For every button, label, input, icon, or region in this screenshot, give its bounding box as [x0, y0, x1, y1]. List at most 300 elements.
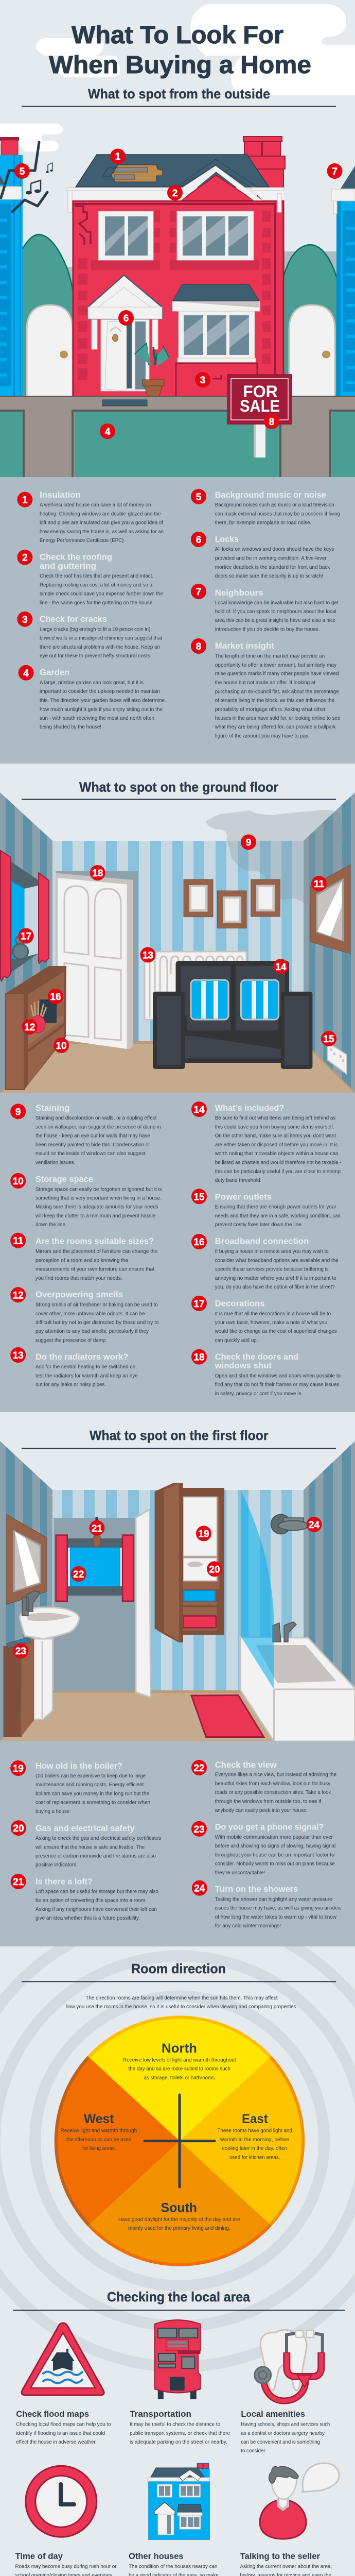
- marker 17: 17: [21, 931, 31, 942]
- item 3 cracks: bowed walls or a misaligned chimney can suggest that: [40, 635, 162, 641]
- item 5 background noise: there, for example aeroplane or road noise.: [215, 519, 311, 526]
- sector south: mainly used for the primary living and dining.: [128, 2225, 230, 2231]
- bay window: [172, 284, 260, 397]
- marker 18: 18: [92, 868, 103, 879]
- marker 16: 16: [50, 992, 61, 1003]
- item 14 what's included: 14: [193, 1105, 205, 1115]
- marker 13: 13: [143, 950, 153, 961]
- item 2 roofing: [17, 550, 163, 606]
- sector east: warmth in the morning, before: [220, 2137, 289, 2143]
- marker 12: 12: [24, 1022, 35, 1033]
- sector east: cooling later in the day, often: [222, 2145, 287, 2151]
- illustration: living room: [0, 788, 355, 1097]
- item 1 insulation: how energy saving the house is, as well as asking for an: [40, 529, 164, 535]
- marker 13: [140, 947, 155, 962]
- sector east: [180, 2056, 305, 2226]
- marker 3: 3: [200, 375, 205, 386]
- item 23 phone signal: With mobile communication more popular than ever: [215, 1834, 333, 1840]
- item 9 staining: seen on wallpaper, can suggest the presence of damp in: [36, 1124, 161, 1130]
- item 17 decorations: [191, 1296, 337, 1344]
- marker 19: [196, 1526, 211, 1541]
- item 4 garden: how much sunlight it gets if you enjoy sitting out in the: [40, 706, 163, 713]
- item 6 locks: All locks on windows and doors should have the keys: [215, 546, 334, 552]
- item 22 view: 22: [193, 1763, 205, 1774]
- item 12 smells: [10, 1287, 159, 1344]
- item: local amenities: can be convenient and is something: [241, 2439, 320, 2445]
- router: [39, 999, 57, 1023]
- item: transportation: It may be useful to check the distance to: [130, 2421, 220, 2428]
- item 22 view: [191, 1760, 336, 1814]
- radiator: [145, 952, 246, 1020]
- item 8 market insight: purchasing an ex-council flat, ask about the percentage: [215, 688, 339, 694]
- sector north: [87, 2015, 272, 2141]
- item 6 locks: provided and be in working condition. A five-lever: [215, 555, 327, 562]
- item 7 neighbours: Neighbours: [215, 588, 263, 598]
- item 22 view: Check the view: [215, 1760, 277, 1770]
- item: time of day: Time of day: [15, 2552, 63, 2561]
- for sale sign: SALE: [240, 397, 280, 415]
- item 20 gas and electrical: Gas and electrical safety: [36, 1824, 135, 1833]
- marker 22: [71, 1566, 86, 1582]
- marker 15: 15: [323, 1034, 334, 1045]
- item 14 what's included: be listed as chattels and would therefore not be taxable -: [215, 1159, 342, 1165]
- for sale sign: FOR: [243, 382, 278, 401]
- item 2 roofing: Check the roof has tiles that are present and intact.: [40, 573, 153, 579]
- side cabinet and phone: [4, 1638, 34, 1737]
- item 2 roofing: simple check could save you expense further down the: [40, 590, 163, 597]
- sector south: Have good daylight for the majority of the day and are: [118, 2216, 240, 2223]
- cushions: [191, 980, 279, 1020]
- item 12 smells: difficult but try not to get distracted by these and try to: [36, 1319, 159, 1326]
- sector south: South: [161, 2201, 197, 2215]
- marker 4: 4: [105, 427, 111, 437]
- item 11 room sizes: [10, 1233, 157, 1281]
- icon: tooth and stethoscope: [255, 2330, 323, 2401]
- item 10 storage: [10, 1173, 162, 1228]
- panel: outside checklist: [0, 477, 355, 764]
- item: other houses: [129, 2552, 222, 2576]
- marker 1: [110, 148, 126, 164]
- compass cross: [145, 2095, 215, 2187]
- ceiling damp stain: [206, 810, 347, 907]
- item 1 insulation: A well-insulated house can save a lot of money on: [40, 502, 151, 508]
- item 8 market insight: houses in the area have sold for, or looking online to see: [215, 715, 341, 721]
- item 23 phone signal: 23: [193, 1824, 205, 1835]
- item: local amenities: as a dentist or doctors surgery nearby: [241, 2430, 325, 2436]
- marker 17: [19, 928, 34, 944]
- walls: [0, 788, 355, 1097]
- item 13 radiators: 13: [13, 1350, 24, 1361]
- item 13 radiators: Do the radiators work?: [36, 1352, 128, 1362]
- item 18 doors and windows: 18: [193, 1352, 205, 1363]
- sector east: These rooms have good light and: [217, 2128, 292, 2134]
- item 19 boiler: buying a house.: [36, 1808, 71, 1815]
- wall mirror: [310, 865, 350, 954]
- marker 20: [207, 1561, 222, 1577]
- marker 22: 22: [73, 1569, 84, 1580]
- floor: [0, 1690, 355, 1741]
- marker 9: 9: [246, 838, 251, 848]
- title: When Buying a Home: [49, 52, 311, 79]
- wall crack: [75, 206, 91, 245]
- marker 21: 21: [92, 1523, 102, 1534]
- item 5 background noise: Background noises such as music or a loud television: [215, 502, 334, 508]
- item 14 what's included: are either taken or disposed of before you move in. It is: [215, 1142, 338, 1148]
- item 21 loft: Is there a loft?: [36, 1877, 93, 1886]
- marker 19: 19: [198, 1529, 209, 1539]
- background blocks and trees: [21, 234, 340, 397]
- heading: ground floor: What to spot on the ground floor: [79, 779, 278, 795]
- main house: [67, 137, 285, 397]
- item 19 boiler: maintenance and running costs. Energy efficient: [36, 1782, 144, 1788]
- item 9 staining: Staining: [36, 1104, 70, 1113]
- item 16 broadband: Broadband connection: [215, 1237, 309, 1246]
- item: local amenities: Local amenities: [241, 2410, 305, 2419]
- item 24 showers: [192, 1880, 341, 1929]
- item 2 roofing: line - the same goes for the guttering on the house.: [40, 600, 154, 606]
- marker 16: [48, 989, 63, 1004]
- walls: [0, 1437, 355, 1747]
- marker 3: [195, 372, 210, 387]
- compass wheel: [55, 2015, 305, 2266]
- marker 6: [118, 310, 134, 326]
- item 10 storage: Making sure there is adequate amounts for your needs: [36, 1204, 158, 1210]
- item 20 gas and electrical: Asking to check the gas and electrical safety certificates: [36, 1835, 161, 1841]
- music notes: [26, 163, 53, 195]
- panel: ground floor checklist: [0, 1093, 355, 1412]
- item 21 loft: 21: [13, 1877, 24, 1888]
- ground: [0, 396, 355, 479]
- item 23 phone signal: they're uncontactable!: [215, 1870, 265, 1876]
- item 14 what's included: duty band threshold.: [215, 1177, 261, 1183]
- item: talking to the seller: Asking the current owner about the area,: [240, 2563, 332, 2569]
- marker 2: 2: [172, 188, 177, 199]
- item 7 neighbours: introduction if you do decide to buy the house.: [215, 626, 320, 633]
- item 13 radiators: test the radiators for warmth and keep an eye: [36, 1373, 138, 1379]
- upper windows: [99, 211, 254, 260]
- item 8 market insight: raise question marks if many other people have viewed: [215, 671, 339, 677]
- marker 7: [327, 163, 343, 179]
- item 7 neighbours: 7: [196, 587, 201, 598]
- item 7 neighbours: Local knowledge can be invaluable but also hard to get: [215, 600, 339, 606]
- item 12 smells: cover other, more unfavourable odours. It can be: [36, 1311, 145, 1317]
- item 8 market insight: opportunity to offer a lower amount, but similarly may: [215, 662, 337, 668]
- marker 20: 20: [209, 1564, 220, 1575]
- item 9 staining: mould on the inside of windows can also suggest: [36, 1150, 146, 1157]
- crack by sign: [212, 375, 221, 379]
- background rings: [0, 1916, 355, 2367]
- item 21 loft: Asking if any neighbours have converted their loft can: [36, 1906, 157, 1912]
- item 20 gas and electrical: will ensure that the house is safe and livable. The: [35, 1844, 145, 1850]
- doorway and door: [54, 1510, 151, 1697]
- item: transportation: [130, 2410, 230, 2445]
- item: time of day: Roads may become busy during rush hour or: [15, 2563, 117, 2569]
- marker 7: 7: [332, 166, 338, 177]
- item 6 locks: mortice deadlock is the standard for front and back: [215, 564, 330, 570]
- marker 23: [13, 1643, 29, 1658]
- item 17 decorations: Decorations: [215, 1299, 264, 1308]
- marker 10: [54, 1038, 69, 1053]
- item: check flood maps: [16, 2410, 111, 2445]
- item 20 gas and electrical: 20: [13, 1823, 24, 1834]
- sector east: used for kitchen areas.: [229, 2154, 280, 2160]
- item 11 room sizes: 11: [13, 1236, 24, 1247]
- item 12 smells: 12: [13, 1290, 24, 1301]
- mirror: [7, 1515, 46, 1604]
- item 22 view: roads or any possible construction sites. Take a look: [215, 1789, 331, 1795]
- item 16 broadband: annoying no matter where you are! If it is important to: [215, 1275, 336, 1281]
- sector north: the day and so are more suited to rooms such: [129, 2066, 230, 2072]
- marker 8: [264, 414, 279, 429]
- music noise: [1, 142, 47, 212]
- item: talking to the seller: Talking to the seller: [240, 2552, 321, 2561]
- item: transportation: is adequate parking on the street or nearby.: [130, 2439, 227, 2445]
- icon: blue house: [148, 2463, 209, 2539]
- icon: flood warning triangle: [22, 2323, 104, 2395]
- marker 14: 14: [275, 962, 287, 973]
- sector west: West: [84, 2112, 114, 2126]
- item 6 locks: Locks: [215, 535, 239, 544]
- item 3 cracks: 3: [22, 615, 28, 625]
- item: local amenities: to consider.: [241, 2448, 267, 2454]
- item 7 neighbours: hold of. If you can speak to neighbours about the local: [215, 608, 336, 615]
- marker 6: 6: [123, 313, 129, 324]
- item 9 staining: been recently painted to hide this. Condensation or: [36, 1142, 150, 1148]
- window and curtains: [56, 1535, 134, 1601]
- sector east: East: [242, 2112, 268, 2126]
- item 2 roofing: Check the roofing: [40, 553, 112, 562]
- sector north: Receive low levels of light and warmth throughout: [123, 2057, 236, 2063]
- item 17 decorations: would like to change as the cost of superficial changes: [215, 1328, 337, 1334]
- air freshener: [31, 1001, 46, 1033]
- intro text: The direction rooms are facing will determine when the sun hits them. This may affect: [85, 1995, 278, 2001]
- item: other houses: Other houses: [129, 2552, 183, 2561]
- marker 14: [273, 959, 289, 974]
- item 5 background noise: [191, 489, 340, 526]
- item 5 background noise: can mask external noises that may be a concern if living: [215, 511, 340, 517]
- item 10 storage: 10: [13, 1176, 24, 1187]
- item 9 staining: Staining and discoloration on walls, or a rippling effect: [36, 1115, 157, 1121]
- cupboard: [6, 966, 66, 1090]
- item 19 boiler: boilers can save you money in the long run but the: [36, 1790, 149, 1797]
- marker 5: [14, 163, 30, 179]
- item 12 smells: Strong smells of air freshener or baking can be used to: [36, 1301, 158, 1308]
- item 6 locks: doors so make sure the security is up to scratch!: [215, 573, 323, 579]
- marker 9: [241, 835, 256, 850]
- illustration: street scene: [0, 137, 355, 479]
- for sale sign: [227, 374, 292, 457]
- icon: bus: [155, 2320, 201, 2399]
- item 7 neighbours: [191, 584, 339, 633]
- damaged roof tiles: [103, 165, 163, 182]
- item 15 power outlets: 15: [193, 1192, 205, 1202]
- airing cupboard and boiler: [155, 1483, 224, 1642]
- item 10 storage: Storage space: [36, 1175, 93, 1184]
- item 10 storage: Storage space can easily be forgotten or ignored but it is: [36, 1186, 162, 1192]
- item 1 insulation: heating. Checking windows are double-glazed and the: [40, 511, 161, 517]
- marker 10: 10: [56, 1041, 67, 1052]
- item 3 cracks: there are structural problems with the house. Keep an: [40, 644, 160, 650]
- item: check flood maps: effect the house in adverse weather.: [16, 2439, 97, 2445]
- marker 5: 5: [20, 166, 25, 177]
- clouds: [0, 4, 355, 151]
- item 17 decorations: your own taste, however, make a note of what you: [215, 1319, 327, 1326]
- panel: first floor checklist: [0, 1741, 355, 1946]
- item: other houses: The condition of the houses nearby can: [129, 2563, 218, 2569]
- item 16 broadband: speeds these services provide because buffering is: [215, 1266, 329, 1273]
- item 11 room sizes: Are the rooms suitable sizes?: [36, 1237, 154, 1246]
- item 8 market insight: the house but not made an offer. If looking at: [215, 680, 315, 686]
- item: check flood maps: identify if flooding is an issue that could: [16, 2430, 105, 2436]
- item 15 power outlets: Ensuring that there are enough power outlets for your: [215, 1204, 336, 1210]
- heading: room direction: Room direction: [131, 1961, 226, 1976]
- item 15 power outlets: needs and that they are in a safe, working condition, can: [215, 1213, 341, 1219]
- item 4 garden: being shaded by the house!: [40, 724, 101, 730]
- item 8 market insight: [191, 638, 341, 739]
- icon: seller with speech bubble: [260, 2463, 339, 2539]
- item 4 garden: this. The direction your garden faces will also determine: [40, 698, 165, 704]
- item 19 boiler: cost of replacement is something to consider when: [36, 1800, 150, 1806]
- item 22 view: beautiful skies from each window, look out for busy: [215, 1781, 331, 1787]
- item 22 view: through the windows from outside too, to see if: [215, 1798, 321, 1804]
- item 19 boiler: How old is the boiler?: [36, 1761, 122, 1771]
- item: check flood maps: Check flood maps: [16, 2410, 89, 2419]
- item 17 decorations: It is rare that all the decorations in a house will be to: [215, 1311, 331, 1317]
- item 8 market insight: The length of time on the market may provide an: [215, 653, 325, 659]
- item 15 power outlets: Power outlets: [215, 1192, 272, 1201]
- item 5 background noise: 5: [196, 492, 202, 503]
- item 21 loft: Loft space can be useful for storage but there may also: [36, 1889, 158, 1895]
- item 4 garden: [19, 665, 165, 730]
- item 18 doors and windows: find any that do not fit their frames or may cause issues: [215, 1382, 339, 1388]
- sofa: [153, 961, 312, 1069]
- marker 18: [90, 865, 105, 880]
- item: transportation: public transport systems, or check that there: [130, 2430, 230, 2436]
- item 16 broadband: you, do you also have the option of fibre in the street?: [215, 1284, 335, 1290]
- side gates: [27, 305, 335, 397]
- marker 24: [307, 1517, 322, 1532]
- marker 21: [89, 1520, 104, 1536]
- item: check flood maps: Checking local flood maps can help you to: [16, 2421, 111, 2428]
- item 3 cracks: [17, 612, 162, 659]
- item 11 room sizes: you find rooms that match your needs.: [36, 1275, 122, 1281]
- item 3 cracks: Large cracks (big enough to fit a 10 pence coin in),: [40, 626, 152, 633]
- item 23 phone signal: throughout your house can be an important factor to: [215, 1852, 334, 1858]
- item 24 showers: issues the house may have, as well as giving you an idea: [215, 1905, 341, 1911]
- item: time of day: [15, 2552, 117, 2576]
- heading: first floor: What to spot on the first floor: [90, 1428, 269, 1443]
- porch: [88, 275, 162, 391]
- item 14 what's included: What’s included?: [215, 1104, 284, 1113]
- item 11 room sizes: measurements of your own furniture can ensure that: [36, 1266, 154, 1273]
- item 23 phone signal: consider. Nobody wants to miss out on plans because: [215, 1861, 335, 1867]
- item 10 storage: something that is very important when living in a house.: [36, 1195, 162, 1201]
- item 8 market insight: Market insight: [215, 641, 275, 651]
- item 9 staining: the house - keep an eye out for walls that may have: [36, 1133, 150, 1139]
- item 9 staining: [10, 1104, 161, 1165]
- sector north: North: [162, 2041, 197, 2056]
- sector west: [55, 2056, 180, 2226]
- item 20 gas and electrical: presence of carbon monoxide and fire alarms are also: [36, 1853, 156, 1859]
- sink: [20, 1591, 79, 1719]
- item 8 market insight: what they are being offered for, can provide a ballpark: [215, 724, 336, 730]
- item 16 broadband: consider what broadband options are available and the: [215, 1257, 339, 1263]
- marker 4: [100, 423, 115, 439]
- item 1 insulation: Energy Performance Certificate (EPC).: [40, 537, 125, 544]
- loft hatch handle: [94, 1517, 101, 1547]
- sector west: Receive light and warmth through: [61, 2128, 137, 2134]
- item 10 storage: down the line.: [36, 1222, 67, 1228]
- item 22 view: Everyone likes a nice view, but instead of admiring the: [215, 1772, 336, 1778]
- item 12 smells: pay attention to any bad smells, particularly if they: [36, 1328, 149, 1334]
- item 6 locks: 6: [196, 535, 201, 546]
- item 21 loft: be an option of converting this space into a room.: [36, 1897, 147, 1904]
- item 13 radiators: Ask for the central heating to be switched on,: [36, 1364, 137, 1370]
- item 8 market insight: 8: [196, 641, 201, 652]
- item 3 cracks: eye out for these to prevent hefty structural costs.: [40, 653, 151, 659]
- item 23 phone signal: Do you get a phone signal?: [215, 1823, 324, 1832]
- marker 11: 11: [314, 879, 324, 890]
- item 19 boiler: 19: [13, 1764, 24, 1774]
- item 11 room sizes: Mirrors and the placement of furniture can change the: [36, 1248, 157, 1255]
- item: transportation: Transportation: [130, 2410, 191, 2419]
- right neighbouring house: [331, 166, 355, 397]
- title: [49, 22, 311, 79]
- marker 11: [311, 876, 327, 891]
- item 3 cracks: Check for cracks: [40, 615, 107, 624]
- item 18 doors and windows: in safety, privacy or cost if you move in.: [215, 1391, 303, 1397]
- bath and shower screen: [240, 1491, 355, 1741]
- item 19 boiler: [10, 1760, 150, 1815]
- item 8 market insight: of tenants living in the block, as this can influence the: [215, 698, 334, 704]
- item 14 what's included: On the other hand, make sure all items you don't want: [215, 1133, 336, 1139]
- item 14 what's included: this can be particularly useful if you are close to a stamp: [215, 1168, 341, 1175]
- door: [56, 871, 138, 1049]
- item 4 garden: Garden: [40, 668, 70, 677]
- item 4 garden: important to consider the upkeep needed to maintain: [40, 688, 160, 694]
- item 2 roofing: Replacing roofing can cost a lot of money and so a: [40, 582, 152, 588]
- floor: [0, 1041, 355, 1093]
- item 22 view: anybody can easily peek into your house.: [215, 1807, 308, 1814]
- marker 2: [167, 185, 183, 200]
- item 23 phone signal: before and showing no signs of slowing, having signal: [215, 1843, 335, 1849]
- item 17 decorations: can quickly add up.: [215, 1337, 258, 1344]
- item 14 what's included: [191, 1101, 342, 1183]
- shower head: [271, 1515, 308, 1534]
- item 8 market insight: probability of mortgage offers. Asking what other: [215, 706, 326, 713]
- marker 12: [22, 1019, 38, 1035]
- item 14 what's included: worth noting that moveable objects within a house can: [215, 1150, 339, 1157]
- heading: local area: Checking the local area: [107, 2289, 251, 2304]
- title: What To Look For: [72, 22, 283, 49]
- item 1 insulation: loft and pipes are insulated can give you a good idea of: [40, 519, 163, 526]
- sector south: [87, 2141, 272, 2266]
- item 11 room sizes: perception of a room and so knowing the: [36, 1257, 128, 1263]
- item 1 insulation: Insulation: [40, 490, 81, 500]
- item 9 staining: 9: [15, 1107, 21, 1117]
- item 15 power outlets: prevent costly fixes later down the line.: [215, 1222, 303, 1228]
- picture frames: [184, 879, 280, 928]
- item 14 what's included: this could save you from buying some items yourself.: [215, 1124, 334, 1130]
- sector west: the afternoon so can be used: [66, 2137, 131, 2143]
- item 18 doors and windows: Open and shut the windows and doors when possible to: [215, 1373, 341, 1379]
- item 18 doors and windows: [191, 1349, 341, 1397]
- left neighbouring house: [0, 137, 23, 397]
- sector west: for living areas.: [82, 2145, 116, 2151]
- item 1 insulation: 1: [22, 495, 28, 506]
- item 1 insulation: [17, 490, 164, 544]
- item 2 roofing: and guttering: [40, 562, 96, 571]
